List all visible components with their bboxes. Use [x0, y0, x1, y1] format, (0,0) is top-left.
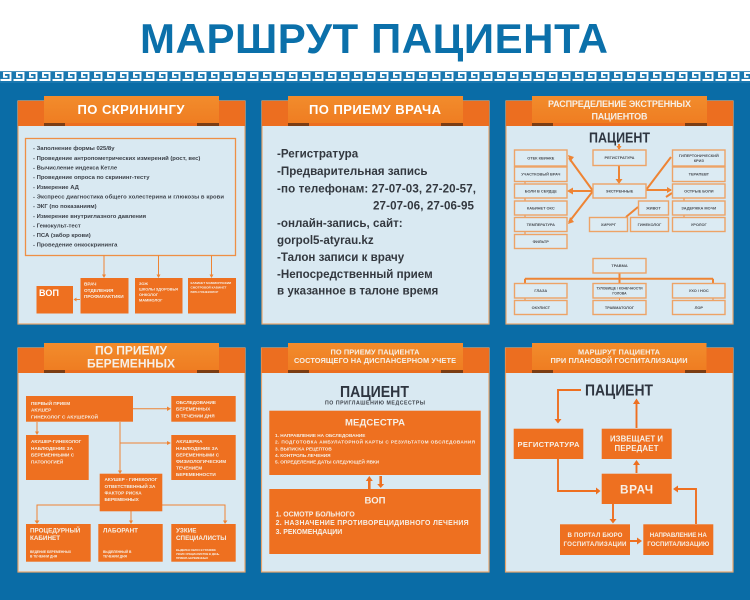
box: risk obstetrician — [100, 474, 162, 511]
box: risk obstetrician: ОТВЕТСТВЕННЫЙ ЗА — [104, 482, 156, 489]
box: registry: РЕГИСТРАТУРА — [518, 440, 580, 449]
flow boxes: left column: УЧАСТКОВЫЙ ВРАЧ — [521, 172, 561, 177]
heading: planned hospitalisation — [550, 348, 688, 365]
flow boxes: right column: ГИПЕРТОНИЧЕСКИЙ — [679, 153, 719, 158]
flow boxes: centre: РЕГИСТРАТУРА — [604, 155, 635, 160]
label: patient by invitation: ПО ПРИГЛАШЕНИЮ МЕДСЕСТРЫ — [325, 400, 425, 406]
box: specialists: УЗКИХ СПЕЦИАЛИСТОВ В ДЕНЬ — [176, 552, 219, 556]
box: hospitalisation bureau portal: В ПОРТАЛ БЮРО — [568, 532, 623, 539]
label: patient: ПАЦИЕНТ — [589, 130, 650, 146]
ornamental band — [0, 70, 750, 83]
heading: pregnant patients — [87, 344, 175, 370]
flow boxes: trauma: ТРАВМАТОЛОГ — [605, 305, 635, 310]
box: specialists: СПЕЦИАЛИСТЫ — [176, 535, 226, 542]
label: patient: ПАЦИЕНТ — [585, 382, 653, 400]
heading: pregnant patients: БЕРЕМЕННЫХ — [87, 356, 175, 370]
appointment steps: 27-07-06, 27-06-95 — [373, 200, 475, 212]
box: prevention doctor — [80, 278, 128, 314]
box: general practitioner: ВОП — [364, 496, 386, 506]
box: specialists: ВЫДЕЛЕН ОБРАЗ В ГРАФИКЕ — [176, 548, 216, 552]
heading: dispensary patients: ПО ПРИЕМУ ПАЦИЕНТА — [330, 348, 420, 356]
checklist box: - Проведение онкоскрининга — [33, 243, 118, 249]
flow boxes: trauma: ЛОР — [695, 305, 703, 310]
flow boxes: trauma: УХО / НОС — [689, 288, 709, 293]
heading: pregnant patients: ПО ПРИЕМУ — [95, 344, 168, 358]
box: obstetrician pathology: БЕРЕМЕННЫМИ С — [31, 452, 75, 458]
box: lab technician: ВЫДЕЛЕННЫЙ В — [103, 550, 132, 554]
box: midwife: ТЕЧЕНИЕМ — [176, 466, 202, 470]
checklist box: - Проведение опроса по скрининг-тесту — [33, 175, 150, 181]
box: procedure room: КАБИНЕТ — [30, 535, 60, 542]
box: obstetrician pathology: ПАТОЛОГИЕЙ — [31, 458, 64, 464]
checklist box: - ПСА (забор крови) — [33, 232, 91, 239]
heading: emergency patients: РАСПРЕДЕЛЕНИЕ ЭКСТРЕННЫХ — [548, 99, 691, 109]
heading: dispensary patients — [294, 348, 456, 365]
title: МАРШРУТ ПАЦИЕНТА — [140, 15, 608, 62]
appointment steps: в указанное в талоне время — [277, 284, 438, 298]
box: first visit — [26, 396, 133, 422]
box: hospitalisation bureau portal — [560, 524, 630, 555]
box: midwife: АКУШЕРКА — [176, 439, 203, 444]
checklist box — [26, 138, 236, 256]
heading: emergency patients: ПАЦИЕНТОВ — [592, 112, 648, 122]
checklist box: - Измерение АД — [33, 185, 80, 191]
box: nurse: 4. КОНТРОЛЬ ЛЕЧЕНИЯ — [275, 453, 331, 458]
panel: planned hospitalisation — [506, 343, 733, 572]
appointment steps: -Регистратура — [277, 148, 359, 160]
panel: screening — [18, 96, 245, 324]
flow boxes: centre: ХИРУРГ — [601, 222, 617, 227]
box: ВОП: ВОП — [39, 288, 59, 298]
box: doctor: ВРАЧ — [620, 482, 653, 496]
appointment steps: -по телефонам: 27-07-03, 27-20-57, — [277, 182, 476, 195]
box: specialists: ПРИЕМА БЕРЕМЕННЫХ — [176, 556, 208, 560]
box: midwife: НАБЛЮДЕНИЕ ЗА — [176, 446, 219, 451]
box: notifies and transfers: ИЗВЕЩАЕТ И — [610, 435, 663, 444]
checklist box: - Вычисление индекса Кетле — [33, 166, 118, 172]
box: notifies and transfers: ПЕРЕДАЕТ — [614, 444, 659, 453]
flow boxes: trauma: ТУЛОВИЩЕ / КОНЕЧНОСТИ — [596, 286, 643, 290]
box: obstetrician pathology: НАБЛЮДЕНИЕ ЗА — [31, 446, 74, 451]
appointment steps — [277, 148, 476, 298]
flow boxes: left column: ФИЛЬТР — [533, 239, 549, 244]
heading: planned hospitalisation: МАРШРУТ ПАЦИЕНТА — [578, 348, 661, 356]
panel: doctor appointment — [262, 96, 489, 324]
box: mammography: СМОТРОВОЙ КАБИНЕТ — [190, 286, 227, 290]
box: nurse: МЕДСЕСТРА — [345, 418, 405, 429]
box: healthy lifestyle — [135, 278, 182, 314]
box: obstetrician pathology: АКУШЕР-ГИНЕКОЛОГ — [31, 439, 82, 444]
hospitalisation flow arrows — [554, 390, 696, 544]
box: examination — [171, 396, 236, 422]
box: prevention doctor: ОТДЕЛЕНИЯ — [84, 288, 114, 293]
box: midwife: БЕРЕМЕННЫМИ С — [176, 452, 220, 458]
label: patient by invitation — [325, 384, 425, 406]
flow boxes: trauma: ТРАВМА — [611, 263, 628, 268]
box: notifies and transfers — [602, 429, 672, 459]
box: registry — [514, 429, 583, 459]
heading: doctor appointment: ПО ПРИЕМУ ВРАЧА — [309, 102, 442, 117]
box: referral for hospitalisation — [643, 524, 713, 555]
appointment steps: -онлайн-запись, сайт: — [277, 217, 403, 230]
checklist box: - Экспресс диагностика общего холестерина и глюкозы в крови — [33, 194, 224, 200]
appointment steps: -Предварительная запись — [277, 165, 428, 178]
box: prevention doctor: ВРАЧ — [84, 282, 96, 286]
box: first visit: ПЕРВЫЙ ПРИЕМ — [31, 399, 70, 406]
box: nurse: 5. ОПРЕДЕЛЕНИЕ ДАТЫ СЛЕДУЮЩЕЙ ЯВКИ — [275, 457, 380, 464]
box: nurse: 3. ВЫПИСКА РЕЦЕПТОВ — [275, 446, 332, 451]
box: examination: ОБСЛЕДОВАНИЕ — [176, 400, 216, 405]
box: referral for hospitalisation: НАПРАВЛЕНИЕ НА — [650, 532, 707, 539]
flow boxes: left column: КАБИНЕТ ОКС — [527, 206, 555, 210]
flow boxes: left column: ОТЕК КВИНКЕ — [527, 156, 555, 160]
flow boxes: right column — [672, 150, 725, 232]
box: first visit: АКУШЕР — [31, 408, 51, 413]
flow boxes: trauma: ГЛАЗА — [534, 288, 547, 293]
flow boxes: right column: ОСТРЫЕ БОЛИ — [684, 188, 714, 194]
box: procedure room: В ТЕЧЕНИИ ДНЯ — [30, 554, 58, 558]
box: healthy lifestyle: МАММОЛОГ — [139, 298, 163, 302]
emergency flow arrows — [525, 144, 713, 300]
box: healthy lifestyle: ШКОЛЫ ЗДОРОВЬЯ — [139, 286, 178, 292]
flow boxes: right column: ТЕРАПЕВТ — [689, 172, 710, 177]
flow boxes: centre: ГИНЕКОЛОГ — [638, 222, 662, 227]
flow boxes: centre: ЭКСТРЕННЫЕ — [606, 188, 634, 194]
checklist box: - Измерение внутриглазного давления — [33, 214, 147, 220]
box: lab technician: ТЕЧЕНИИ ДНЯ — [103, 554, 127, 558]
appointment steps: gorpol5-atyrau.kz — [277, 234, 374, 247]
box: midwife — [171, 435, 236, 480]
flow boxes: right column: УРОЛОГ — [691, 222, 708, 227]
flow boxes: trauma: ГОЛОВА — [612, 292, 627, 296]
flow boxes: centre: ЖИВОТ — [645, 206, 661, 210]
box: specialists: УЗКИЕ — [176, 528, 196, 535]
box: procedure room: ВЕДЕНИЕ БЕРЕМЕННЫХ — [30, 550, 72, 554]
box: risk obstetrician: ФАКТОР РИСКА — [104, 490, 142, 496]
box: general practitioner: 1. ОСМОТР БОЛЬНОГО — [276, 512, 355, 518]
box: mammography: КАБИНЕТ МАММОГРАФИИ — [190, 281, 232, 285]
box: mammography — [188, 278, 236, 314]
box: general practitioner — [269, 489, 481, 554]
box: examination: В ТЕЧЕНИИ ДНЯ — [176, 414, 215, 419]
flow boxes: left column: БОЛИ В СЕРДЦЕ — [525, 188, 557, 194]
panel: pregnant patients — [18, 343, 245, 572]
checklist box: - Гемокульт-тест — [33, 223, 81, 229]
flow boxes: trauma — [514, 258, 725, 314]
box: general practitioner: 2. НАЗНАЧЕНИЕ ПРОТИВОРЕЦИДИВНОГО ЛЕЧЕНИЯ — [276, 520, 469, 527]
box: nurse: 2. ПОДГОТОВКА АМБУЛАТОРНОЙ КАРТЫ С РЕЗУЛЬТАТОМ ОБСЛЕДОВАНИЯ — [275, 438, 476, 445]
appointment steps: -Непосредственный прием — [277, 268, 433, 281]
flow boxes: right column: ЗАДЕРЖКА МОЧИ — [681, 206, 716, 210]
box: specialists — [171, 524, 236, 562]
flow boxes: centre — [590, 150, 668, 232]
pregnancy flow arrows — [34, 406, 228, 524]
box: examination: БЕРЕМЕННЫХ — [176, 407, 211, 412]
box: ВОП — [36, 286, 73, 314]
flow boxes: left column: ТЕМПЕРАТУРА — [527, 222, 555, 227]
flow boxes: right column: КРИЗ — [694, 158, 704, 163]
flow boxes: trauma: ОКУЛИСТ — [532, 305, 551, 310]
box: risk obstetrician: БЕРЕМЕННЫХ — [104, 497, 140, 502]
checklist box: - ЭКГ (по показаниям) — [33, 204, 97, 210]
heading: emergency patients — [548, 99, 691, 122]
box: lab technician — [98, 524, 163, 562]
box: prevention doctor: ПРОФИЛАКТИКИ — [84, 294, 124, 299]
flow boxes: left column — [514, 150, 567, 248]
label: patient by invitation: ПАЦИЕНТ — [340, 384, 409, 401]
box: healthy lifestyle: ЗОЖ — [139, 281, 148, 286]
box: healthy lifestyle: ОНКОЛОГ — [139, 292, 159, 297]
box: nurse: 1. НАПРАВЛЕНИЕ НА ОБСЛЕДОВАНИЕ — [275, 433, 365, 438]
box: lab technician: ЛАБОРАНТ — [103, 528, 138, 535]
checklist box: - Проведение антропометрических измерений (рост, вес) — [33, 155, 200, 162]
box: midwife: БЕРЕМЕННОСТИ — [176, 472, 216, 477]
box: obstetrician pathology — [26, 435, 89, 480]
heading: screening: ПО СКРИНИНГУ — [78, 102, 185, 117]
box: mammography: ВРАЧ ГИНЕКОЛОГ — [190, 290, 219, 294]
box: procedure room: ПРОЦЕДУРНЫЙ — [30, 526, 81, 535]
box: doctor — [602, 474, 672, 504]
box: hospitalisation bureau portal: ГОСПИТАЛИЗАЦИИ — [564, 541, 627, 548]
heading: dispensary patients: СОСТОЯЩЕГО НА ДИСПАНСЕРНОМ УЧЕТЕ — [294, 356, 456, 365]
arrows: nurse and doctor exchange — [366, 476, 384, 489]
box: general practitioner: 3. РЕКОМЕНДАЦИИ — [276, 529, 342, 536]
panel: dispensary patients — [262, 343, 489, 572]
box: referral for hospitalisation: ГОСПИТАЛИЗАЦИЮ — [647, 541, 710, 548]
heading: planned hospitalisation: ПРИ ПЛАНОВОЙ ГОСПИТАЛИЗАЦИИ — [550, 356, 688, 365]
box: nurse — [269, 411, 481, 475]
box: midwife: ФИЗИОЛОГИЧЕСКИМ — [176, 459, 226, 464]
panel: emergency patients — [506, 96, 733, 324]
box: procedure room — [26, 524, 91, 562]
box: risk obstetrician: АКУШЕР - ГИНЕКОЛОГ — [104, 477, 158, 482]
box: first visit: ГИНЕКОЛОГ С АКУШЕРКОЙ — [31, 412, 99, 419]
checklist box: - Заполнение формы 025/8у — [33, 145, 115, 152]
arrows: checklist to offices — [74, 256, 214, 302]
appointment steps: -Талон записи к врачу — [277, 251, 405, 264]
